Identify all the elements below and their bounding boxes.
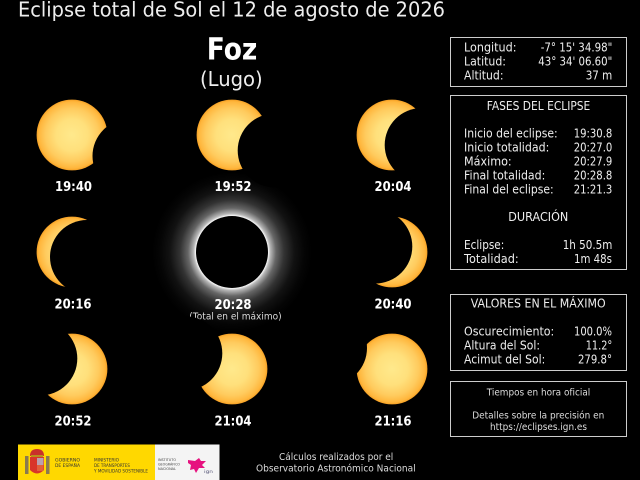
panel: eclipse phases and duration: 20:27.0 (574, 141, 612, 155)
panel: eclipse phases and duration: Inicio totalidad: (464, 141, 549, 155)
panel: values at maximum: 11.2° (586, 339, 612, 353)
eclipse phase 21:16 (293, 311, 427, 430)
panel: coordinates (450, 38, 626, 86)
ministry text: MINISTERIO (94, 458, 120, 464)
panel: time notes (450, 382, 626, 436)
eclipse phase 19:40: 19:40 (55, 179, 92, 195)
eclipse phase 20:16 (37, 217, 124, 312)
panel: eclipse phases and duration: Máximo: (464, 155, 512, 169)
icon: institute pink mark (188, 458, 206, 473)
eclipse phase 19:52 (197, 100, 312, 195)
eclipse phase 21:04 (148, 316, 267, 430)
panel: eclipse phases and duration: Final del eclipse: (464, 183, 554, 197)
panel: eclipse phases and duration: FASES DEL ECLIPSE (487, 99, 590, 113)
panel: coordinates: Altitud: (464, 69, 504, 83)
panel: values at maximum: Acimut del Sol: (464, 353, 545, 367)
panel: coordinates: -7° 15' 34.98" (541, 41, 612, 55)
panel: eclipse phases and duration: Eclipse: (464, 238, 504, 252)
icon: coat of arms (25, 449, 50, 474)
panel: coordinates: Latitud: (464, 55, 506, 69)
panel: eclipse phases and duration: 1m 48s (574, 252, 612, 266)
location heading (200, 32, 263, 91)
eclipse phase 21:04: 21:04 (214, 414, 252, 430)
government text: DE ESPAÑA (55, 462, 80, 469)
institute acronym: ign (204, 469, 213, 475)
eclipse phase 20:28 totality with corona: 20:28 (214, 297, 252, 313)
eclipse phase 20:16: 20:16 (54, 296, 92, 312)
panel: eclipse phases and duration: 1h 50.5m (563, 238, 612, 252)
panel: eclipse phases and duration: 19:30.8 (574, 127, 612, 141)
logo strip (18, 444, 220, 480)
eclipse phase 20:52 (3, 322, 107, 430)
eclipse phase 19:40 (37, 100, 166, 195)
eclipse phase 20:40 (338, 210, 427, 312)
panel: time notes: Detalles sobre la precisión en (472, 410, 604, 421)
institute text: INSTITUTO (158, 457, 176, 462)
ministry text (93, 458, 148, 474)
government text: GOBIERNO (55, 458, 81, 464)
eclipse phase 20:52: 20:52 (54, 414, 92, 430)
institute text: GEOGRÁFICO (158, 462, 180, 466)
panel: eclipse phases and duration: Inicio del eclipse: (464, 127, 558, 141)
panel: eclipse phases and duration: 21:21.3 (574, 183, 612, 197)
government text (55, 458, 81, 469)
panel: eclipse phases and duration: 20:27.9 (574, 155, 612, 169)
footer credit (256, 452, 416, 475)
eclipse phase 20:28 totality with corona: (Total en el máximo) (189, 312, 282, 322)
panel: time notes: Tiempos en hora oficial (486, 388, 590, 399)
panel: eclipse phases and duration: Final totalidad: (464, 169, 545, 183)
eclipse phase 21:16: 21:16 (374, 414, 412, 430)
footer credit: Observatorio Astronómico Nacional (256, 464, 416, 475)
eclipse phase 19:52: 19:52 (214, 179, 252, 195)
footer credit: Cálculos realizados por el (279, 452, 393, 463)
institute text: NACIONAL (158, 466, 177, 471)
ministry text: Y MOVILIDAD SOSTENIBLE (93, 468, 148, 474)
panel: values at maximum: Altura del Sol: (464, 339, 540, 353)
ministry text: DE TRANSPORTES (94, 463, 130, 469)
panel: time notes: https://eclipses.ign.es (490, 422, 587, 433)
panel: coordinates: 43° 34' 06.60" (538, 55, 612, 69)
panel: coordinates: 37 m (586, 69, 612, 83)
panel: values at maximum: 100.0% (574, 325, 612, 339)
eclipse phase 20:04 (357, 100, 459, 195)
panel: eclipse phases and duration: 20:28.8 (574, 169, 612, 183)
panel: values at maximum: VALORES EN EL MÁXIMO (471, 296, 606, 311)
panel: eclipse phases and duration: Totalidad: (463, 252, 519, 266)
panel: values at maximum (450, 294, 626, 370)
panel: eclipse phases and duration (450, 96, 626, 270)
institute text (158, 457, 180, 471)
eclipse phase 20:28 totality with corona (152, 172, 312, 332)
panel: values at maximum: 279.8° (578, 353, 612, 367)
eclipse phase 20:40: 20:40 (374, 296, 412, 312)
panel: coordinates: Longitud: (464, 41, 516, 55)
panel: eclipse phases and duration: DURACIÓN (508, 209, 568, 224)
location heading: (Lugo) (200, 67, 263, 91)
eclipse phase 20:04: 20:04 (374, 179, 412, 195)
panel: values at maximum: Oscurecimiento: (464, 325, 554, 339)
location heading: Foz (207, 32, 257, 67)
